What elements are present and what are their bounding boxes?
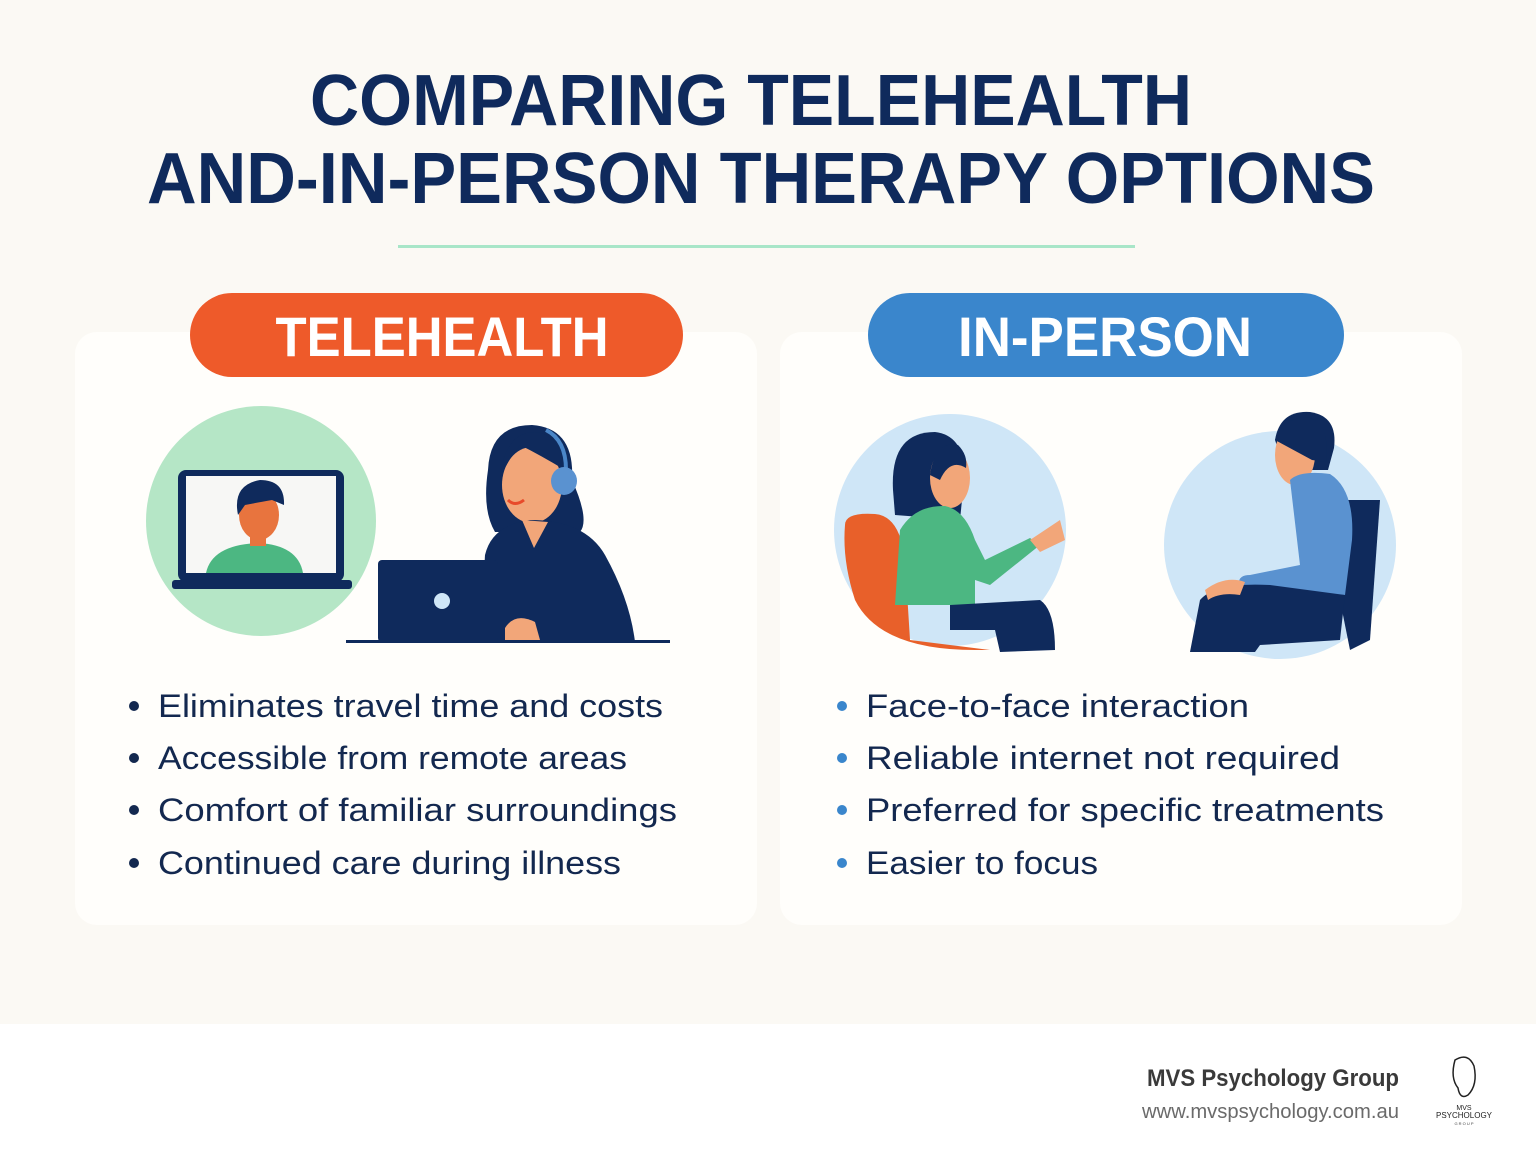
title: COMPARING TELEHEALTH — [310, 61, 1192, 141]
bullets: telehealth: Continued care during illness — [158, 845, 621, 881]
panel: telehealth — [75, 293, 757, 925]
illustration: video call and headset worker — [146, 406, 670, 643]
bullets: in-person: Face-to-face interaction — [866, 688, 1249, 724]
man in dark chair — [1340, 500, 1380, 650]
bullets: telehealth — [129, 688, 677, 881]
bullets: in-person — [837, 688, 1384, 881]
woman — [486, 425, 584, 532]
bullets: in-person: Reliable internet not required — [866, 740, 1340, 776]
footer: MVS Psychology Group — [1147, 1065, 1399, 1092]
bullets: telehealth: Eliminates travel time and costs — [158, 688, 663, 724]
title — [147, 61, 1375, 219]
bullets: telehealth: Accessible from remote areas — [158, 740, 627, 776]
bullets: in-person: Preferred for specific treatments — [866, 792, 1384, 828]
pill: in-person heading: IN-PERSON — [958, 305, 1252, 368]
footer — [0, 1024, 1536, 1154]
footer: www.mvspsychology.com.au — [1141, 1101, 1399, 1123]
pill: in-person heading — [868, 293, 1344, 377]
bullets: telehealth: Comfort of familiar surroundings — [158, 792, 677, 828]
illustration: therapist and client — [834, 412, 1396, 659]
title: AND-IN-PERSON THERAPY OPTIONS — [147, 139, 1375, 219]
woman in orange chair — [844, 514, 990, 650]
logo — [1436, 1057, 1493, 1126]
bullets: in-person: Easier to focus — [866, 845, 1098, 881]
pill: telehealth heading: TELEHEALTH — [276, 305, 608, 368]
logo: G R O U P — [1454, 1121, 1474, 1126]
logo: MVS — [1456, 1105, 1472, 1112]
logo: PSYCHOLOGY — [1436, 1111, 1493, 1120]
panel: in-person — [780, 293, 1462, 925]
pill: telehealth heading — [190, 293, 683, 377]
